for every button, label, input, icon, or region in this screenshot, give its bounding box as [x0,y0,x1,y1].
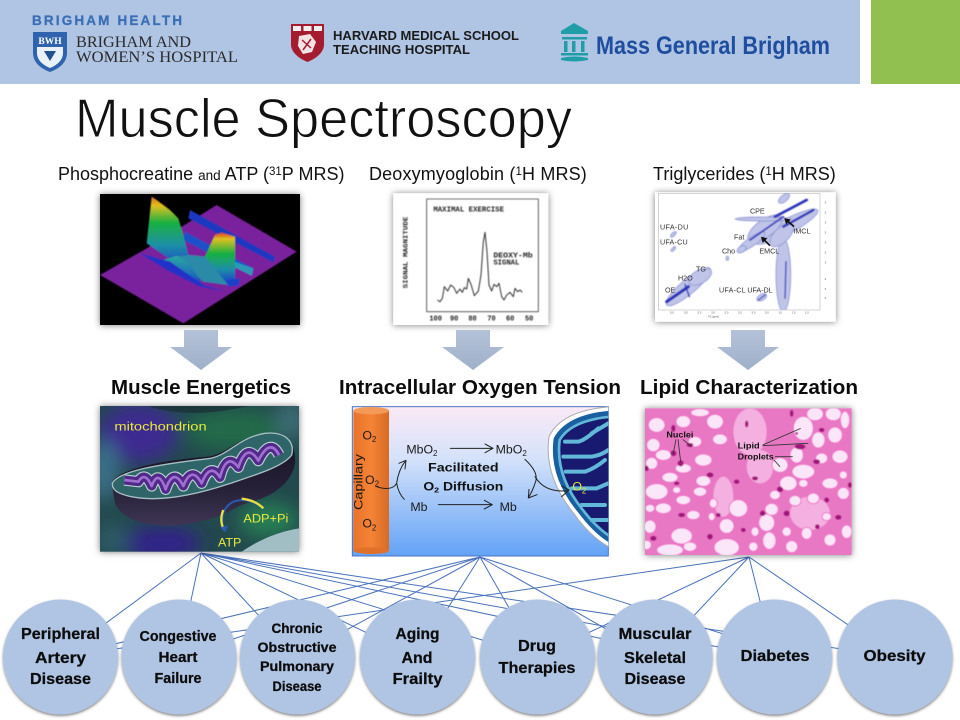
diagram caption: Diffusion [439,480,503,494]
image: deoxy-myoglobin spectrum: DEOXY-Mb [493,252,533,260]
icon: temple [561,23,588,62]
image: deoxy-myoglobin spectrum: 60 [506,316,514,324]
diagram caption [423,460,503,495]
diagram labels: 2 [372,435,377,444]
spectrum peak labels: Fat [734,234,744,242]
diagram labels [352,428,587,532]
circle: Obesity [838,600,952,714]
header band [0,0,860,84]
teaching hospital text [333,29,519,57]
circle: Drug Therapies: Drug [518,638,556,655]
diagram labels: 2 [433,449,438,458]
teaching hospital text: TEACHING HOSPITAL [333,43,470,57]
circle: Chronic Obstructive Pulmonary Disease [240,600,355,714]
diagram caption: Facilitated [428,460,499,474]
hospital name: BRIGHAM AND [76,34,191,51]
blurred background [100,406,299,552]
image: deoxy-myoglobin spectrum: 70 [487,316,496,324]
histology labels: Nuclei [666,429,693,439]
circle: Congestive Heart Failure: Failure [154,671,202,687]
circle: Diabetes [717,600,832,714]
image: lipid histology [642,407,852,556]
histology labels: Lipid [738,441,760,451]
organelle body [112,433,295,526]
label: Triglycerides: 1 [765,166,772,178]
icon: BWH shield [33,32,67,72]
axis ticks: 1.0 [792,310,796,314]
image: 31P 3D spectrum [100,194,300,325]
diagram labels: O [362,428,372,442]
diagram labels: Mb [500,500,517,514]
image: deoxy-myoglobin spectrum: 80 [468,316,477,324]
axis ticks: 3 [825,210,827,214]
histology labels: Droplets [738,451,774,461]
hospital name: WOMEN’S HOSPITAL [76,49,238,66]
arrow: oxygen tension down [442,330,504,370]
label: Triglycerides: H MRS) [772,164,836,184]
circle: Muscular Skeletal Disease: Disease [624,671,686,688]
circle: Chronic Obstructive Pulmonary Disease: Chronic [272,621,323,636]
circle: Peripheral Artery Disease [3,600,118,714]
axis ticks: 5.0 [684,310,688,314]
axis ticks: 3 [825,230,827,234]
label: Phosphocreatine and ATP: Phosphocreatine and ATP ( [58,164,269,184]
spectrum peak labels: OE [665,287,676,295]
circle: Drug Therapies [480,600,595,714]
axis ticks: 5.0 [670,310,674,314]
image: deoxy-myoglobin spectrum: SIGNAL MAGNITUDE [403,216,410,288]
circle: Aging And Frailty [360,600,475,714]
heading: Intracellular Oxygen Tension: Intracellular Oxygen Tension [339,377,621,399]
circle: Diabetes: Diabetes [740,648,810,665]
axis ticks: 3 [825,277,827,281]
circle: Congestive Heart Failure: Congestive [140,629,216,645]
diagram labels: 2 [375,480,380,489]
image: deoxy-myoglobin spectrum: SIGNAL [493,259,519,267]
spectrum peak labels: UFA-CU [660,238,688,246]
circle: Aging And Frailty: And [402,650,432,667]
label: Phosphocreatine and ATP: 31 [269,166,282,178]
panel: facilitated O2 diffusion diagram [352,407,612,556]
circle: Drug Therapies: Therapies [498,660,576,677]
diagram caption: 2 [434,486,439,495]
axis ticks [670,200,827,319]
mitochondrion labels: mitochondrion [114,420,207,434]
circle: Congestive Heart Failure [122,600,236,714]
logo: Harvard Medical School [291,24,519,62]
axis ticks: 3 [825,260,827,264]
heading: Muscle Energetics: Muscle Energetics [111,377,291,399]
mitochondrion labels: ATP [218,536,241,550]
label: Deoxymyoglobin: H MRS) [522,164,587,184]
logo: Mass General Brigham [561,23,830,62]
cristae [124,447,279,489]
axis ticks: 5.0 [711,310,716,314]
axis ticks: 5.0 [725,310,729,314]
brand name: Mass General Brigham [596,32,830,60]
image: deoxy-myoglobin spectrum [393,193,548,325]
image: mitochondrion [87,400,308,560]
arrow: lipid down [717,330,779,370]
diagram labels: Mb [410,500,428,514]
logo: Brigham Health [32,13,238,72]
circle: Peripheral Artery Disease: Disease [30,671,91,688]
image: deoxy-myoglobin spectrum: 50 [525,316,533,324]
capillary [353,407,389,554]
mitochondrion cross-section [548,407,612,548]
histology labels [666,429,774,461]
connector lines [60,553,895,657]
label: Deoxymyoglobin: 1 [515,166,522,178]
annotation leader lines [673,428,808,467]
circle: Congestive Heart Failure: Heart [158,650,198,666]
circle: Peripheral Artery Disease: Artery [35,650,86,667]
diagram labels: O [572,480,582,494]
axis ticks: 3 [825,240,827,244]
icon: Harvard shield [291,24,324,62]
diagram arrows [377,444,569,509]
heading: Lipid Characterization: Lipid Characterization [640,377,858,399]
diagram labels: 2 [372,523,377,532]
axis ticks: 5.0 [765,310,769,314]
circle: Chronic Obstructive Pulmonary Disease: Obstructive [258,640,337,655]
circle: Muscular Skeletal Disease: Muscular [618,626,692,643]
axis ticks: 3 [825,296,827,300]
image: triglycerides 2D spectrum [655,191,836,322]
green corner block [871,0,960,84]
diagram caption: O [423,480,433,494]
circle: Chronic Obstructive Pulmonary Disease: Disease [272,679,322,694]
axis ticks: 5.0 [752,310,756,314]
cycle arrows [222,500,263,530]
image: deoxy-myoglobin spectrum: 100 [429,316,442,324]
axis ticks: 3 [825,200,827,204]
spectrum peak labels [660,208,810,295]
image: deoxy-myoglobin spectrum: 90 [450,316,458,324]
label: Triglycerides: Triglycerides ( [653,164,765,184]
spectrum peak labels: EMCL [759,248,779,256]
diagram labels: MbO [496,442,522,456]
spectrum peak labels: H2O [678,275,693,283]
circle: Peripheral Artery Disease: Peripheral [21,626,100,643]
mitochondrion labels: ADP+Pi [243,512,288,526]
axis ticks: F2 (ppm) [708,315,719,319]
axis ticks: 3 [825,287,827,291]
image: deoxy-myoglobin spectrum: MAXIMAL EXERCISE [433,207,504,215]
diagram labels: O [365,473,375,487]
spectrum peak labels: UFA-DU [660,224,688,232]
spectrum peak labels: Cho [722,248,735,256]
spectrum peak labels: IMCL [793,228,810,236]
circle: Chronic Obstructive Pulmonary Disease: Pulmonary [260,659,335,674]
arrow: energetics down [170,330,232,370]
diagram labels: O [362,517,372,531]
diagram labels: Capillary [352,453,366,510]
circle: Aging And Frailty: Aging [396,626,440,643]
circle: Obesity: Obesity [864,648,926,665]
axis ticks: 1.0 [805,310,809,314]
axis ticks: 3 [825,250,827,254]
mitochondrion labels [114,420,288,550]
circle: Aging And Frailty: Frailty [392,671,443,688]
hospital name [76,34,238,66]
diagram labels: 2 [582,486,587,495]
diagram labels: 2 [522,449,527,458]
spectrum peak labels: UFA-CL [719,287,746,295]
axis ticks: 3 [825,220,827,224]
teaching hospital text: HARVARD MEDICAL SCHOOL [333,29,519,43]
spectrum peak labels: CPE [750,208,765,216]
spectrum peak labels: TG [696,266,706,274]
circle: Muscular Skeletal Disease: Skeletal [624,650,686,667]
brand name: BRIGHAM HEALTH [32,13,182,28]
circle: Muscular Skeletal Disease [598,600,712,714]
title: Muscle Spectroscopy [75,87,572,149]
spectrum peak labels: UFA-DL [747,287,773,295]
icon: BWH shield: BWH [38,37,62,47]
axis ticks: 1.0 [778,310,783,314]
axis ticks: 5.0 [738,310,742,314]
axis ticks: 5.0 [698,310,702,314]
label: Deoxymyoglobin: Deoxymyoglobin ( [369,164,515,184]
label: Phosphocreatine and ATP: P MRS) [282,164,344,184]
diagram labels: MbO [406,442,433,456]
